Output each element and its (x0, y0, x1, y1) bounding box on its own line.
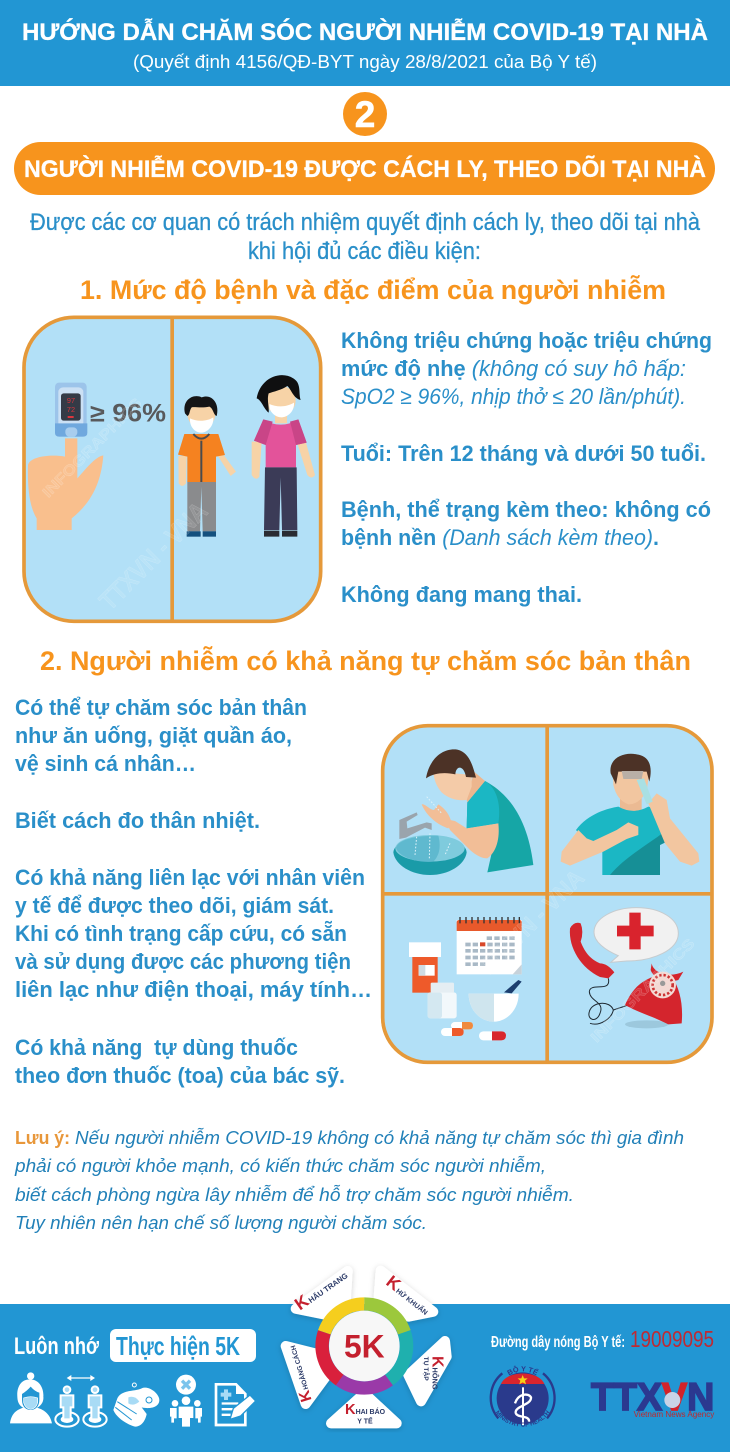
text block: conditions: Không đang mang thai. (341, 582, 582, 607)
text block: conditions: Bệnh, thể trạng kèm theo: không có (341, 497, 711, 522)
text block: conditions (341, 328, 712, 607)
note text: Nếu người nhiễm COVID-19 không có khả năng tự chăm sóc thì gia đình (75, 1128, 684, 1148)
petal: không tụ tập (408, 1341, 447, 1401)
panel: self-care illustrations (383, 726, 712, 1062)
number badge: 2 (355, 94, 375, 135)
petal: không tụ tập: K HÔNG (428, 1356, 445, 1390)
icon: medicines and calendar (409, 917, 522, 1040)
intro text (30, 209, 701, 265)
petal: khai báo y tế (331, 1393, 397, 1425)
icon: man washing (393, 749, 533, 875)
petal: khử khuẩn: KHỬ KHUẨN (383, 1271, 435, 1318)
footer band (0, 1304, 730, 1452)
petal: khai báo y tế: Y TẾ (357, 1415, 373, 1425)
watermark text (40, 395, 213, 616)
icon: pulse oximeter: 72 (67, 405, 75, 414)
footer slogan: Luôn nhớ (14, 1333, 100, 1360)
text block: self-care abilities: Khi có tình trạng cấp cứu, có sẵn (15, 921, 347, 946)
watermark text: INFOGRAPHICS (588, 936, 699, 1046)
text block: conditions: SpO2 ≥ 96%, nhịp thở ≤ 20 lần/phút). (341, 384, 686, 409)
intro text: khi hội đủ các điều kiện: (248, 238, 481, 265)
text block: self-care abilities: vệ sinh cá nhân… (15, 751, 196, 776)
header band (0, 0, 730, 86)
5K diagram (282, 1264, 447, 1425)
footer slogan (14, 1329, 256, 1362)
5K icons row (10, 1372, 256, 1427)
watermark text (472, 864, 699, 1046)
hotline: 19009095 (630, 1326, 714, 1352)
note text: phải có người khỏe mạnh, có kiến thức chăm sóc người nhiễm, (14, 1156, 546, 1176)
figure: child (178, 396, 236, 537)
icon: no gathering (170, 1375, 202, 1427)
text block: conditions: mức độ nhẹ (không có suy hô hấp: (341, 356, 686, 381)
title: HƯỚNG DẪN CHĂM SÓC NGƯỜI NHIỄM COVID-19 TẠI NHÀ (22, 17, 708, 46)
text block: self-care abilities: Có khả năng tự dùng thuốc (15, 1035, 298, 1060)
text block: self-care abilities: và sử dụng được các phương tiện (15, 949, 351, 974)
logo: Ministry of Health: MINISTRY OF HEALTH (496, 1410, 550, 1427)
icon: hand (28, 438, 103, 530)
watermark text: INFOGRAPHICS (40, 395, 146, 501)
text block: self-care abilities: Biết cách đo thân nhiệt. (15, 808, 260, 833)
icon: pulse oximeter: 97 (67, 396, 75, 405)
text block: self-care abilities: liên lạc như điện thoại, máy tính… (15, 977, 372, 1002)
text block: self-care abilities (15, 695, 372, 1088)
icon: health declaration (216, 1384, 256, 1425)
text block: self-care abilities: Có thể tự chăm sóc bản thân (15, 695, 307, 720)
text block: conditions: bệnh nền (Danh sách kèm theo). (341, 525, 659, 550)
footer slogan: Thực hiện 5K (116, 1331, 240, 1361)
section banner (14, 142, 715, 195)
hotline (491, 1326, 714, 1352)
note text (14, 1128, 684, 1233)
heading 1: 1. Mức độ bệnh và đặc điểm của người nhiễm (80, 274, 666, 305)
number badge (343, 92, 387, 136)
petal: khai báo y tế: KHAI BÁO (345, 1402, 386, 1418)
ring segments (322, 1304, 407, 1388)
petal: khoảng cách: KHOẢNG CÁCH (282, 1344, 315, 1404)
panel: illustration SpO2 and people (24, 317, 321, 621)
text block: conditions: Tuổi: Trên 12 tháng và dưới 50 tuổi. (341, 441, 706, 466)
5K centre (329, 1311, 400, 1381)
text block: self-care abilities: y tế để được theo dõi, giám sát. (15, 893, 334, 918)
logo: TTXVN: TTXVN (591, 1375, 714, 1419)
petal: không tụ tập: TỤ TẬP (422, 1357, 431, 1381)
logo: Ministry of Health (490, 1366, 556, 1427)
note text: Tuy nhiên nên hạn chế số lượng người chăm sóc. (15, 1213, 427, 1233)
icon: keep distance (55, 1375, 107, 1427)
text block: conditions: Không triệu chứng hoặc triệu chứng (341, 328, 712, 353)
logo: Ministry of Health: BỘ Y TẾ (507, 1366, 539, 1376)
logo: TTXVN: Vietnam News Agency (634, 1410, 714, 1419)
text block: self-care abilities: theo đơn thuốc (toa) của bác sỹ. (15, 1063, 345, 1088)
note text: biết cách phòng ngừa lây nhiễm để hỗ trợ chăm sóc người nhiễm. (15, 1185, 574, 1205)
heading 2: 2. Người nhiễm có khả năng tự chăm sóc bản thân (40, 645, 691, 676)
text block: self-care abilities: như ăn uống, giặt quần áo, (15, 723, 292, 748)
5K centre: 5K (344, 1327, 385, 1364)
figure: adult (252, 375, 315, 537)
petal: khoảng cách (282, 1344, 328, 1404)
icon: hand washing (113, 1383, 159, 1427)
petal: khẩu trang: KHẨU TRANG (291, 1264, 351, 1314)
icon: emergency phone call (570, 908, 683, 1028)
subtitle: (Quyết định 4156/QĐ-BYT ngày 28/8/2021 của Bộ Y tế) (133, 52, 597, 72)
hotline: Đường dây nóng Bộ Y tế: (491, 1334, 625, 1351)
note text: Lưu ý: (15, 1128, 70, 1148)
icon: pulse oximeter (55, 383, 87, 437)
icon: man taking temperature (561, 754, 699, 875)
section banner: NGƯỜI NHIỄM COVID-19 ĐƯỢC CÁCH LY, THEO DÕI TẠI NHÀ (24, 154, 706, 183)
watermark text: TTXVN - VNA (93, 496, 213, 616)
SpO2 value: ≥ 96% (90, 401, 166, 428)
text block: self-care abilities: Có khả năng liên lạc với nhân viên (15, 865, 365, 890)
watermark text: TTXVN - VNA (472, 864, 589, 982)
icon: mask wearer (10, 1372, 52, 1423)
